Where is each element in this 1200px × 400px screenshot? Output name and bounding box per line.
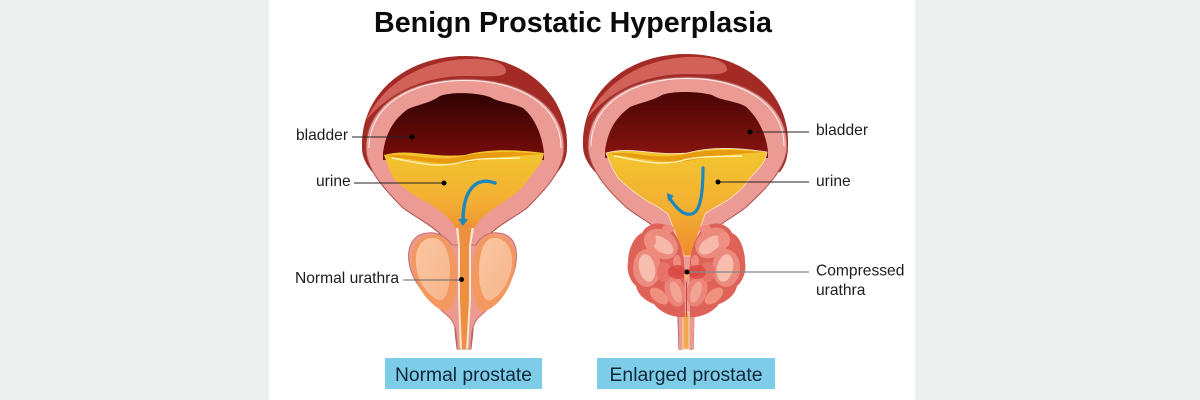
label: urine right: urine — [816, 173, 851, 190]
label: compressed urathra: Compressed — [816, 262, 904, 280]
label: bladder right — [748, 122, 868, 139]
caption: enlarged prostate: Enlarged prostate — [610, 365, 762, 386]
enlarged lobes — [628, 221, 745, 317]
right lobe — [472, 235, 515, 311]
label: normal urathra: Normal urathra — [295, 270, 399, 287]
urine — [606, 148, 767, 256]
urine surface — [386, 152, 542, 164]
label: urine left: urine — [316, 173, 351, 190]
bladder dark urine top — [383, 93, 544, 160]
caption: normal prostate — [385, 358, 542, 389]
bladder wall — [588, 77, 787, 349]
bladder wall — [366, 79, 564, 349]
label: bladder left: bladder — [296, 127, 348, 144]
label: urine left — [316, 173, 446, 190]
bladder outer cap — [362, 56, 567, 174]
flow arrow — [463, 181, 495, 221]
caption: normal prostate: Normal prostate — [395, 365, 532, 386]
label: bladder right: bladder — [816, 122, 868, 139]
label: normal urathra — [295, 270, 464, 287]
label: urine right — [716, 173, 851, 190]
urethra — [456, 228, 474, 349]
label: compressed urathra: urathra — [816, 282, 866, 299]
caption: enlarged prostate — [597, 358, 775, 389]
label: bladder left — [296, 127, 414, 144]
label: compressed urathra — [684, 262, 904, 299]
bladder outer cap — [583, 54, 788, 172]
flow arrow — [669, 168, 703, 214]
title: Benign Prostatic Hyperplasia — [374, 7, 773, 39]
cap highlight — [587, 57, 727, 118]
bladder dark urine top — [605, 92, 768, 158]
left lobe — [412, 235, 457, 311]
panel: enlarged prostate diagram — [583, 54, 788, 349]
cap highlight — [366, 59, 506, 120]
urine — [384, 150, 544, 240]
urethra tube — [678, 310, 695, 349]
panel: normal prostate diagram — [362, 56, 567, 349]
urine surface — [608, 150, 765, 162]
prostate capsule — [409, 233, 516, 349]
